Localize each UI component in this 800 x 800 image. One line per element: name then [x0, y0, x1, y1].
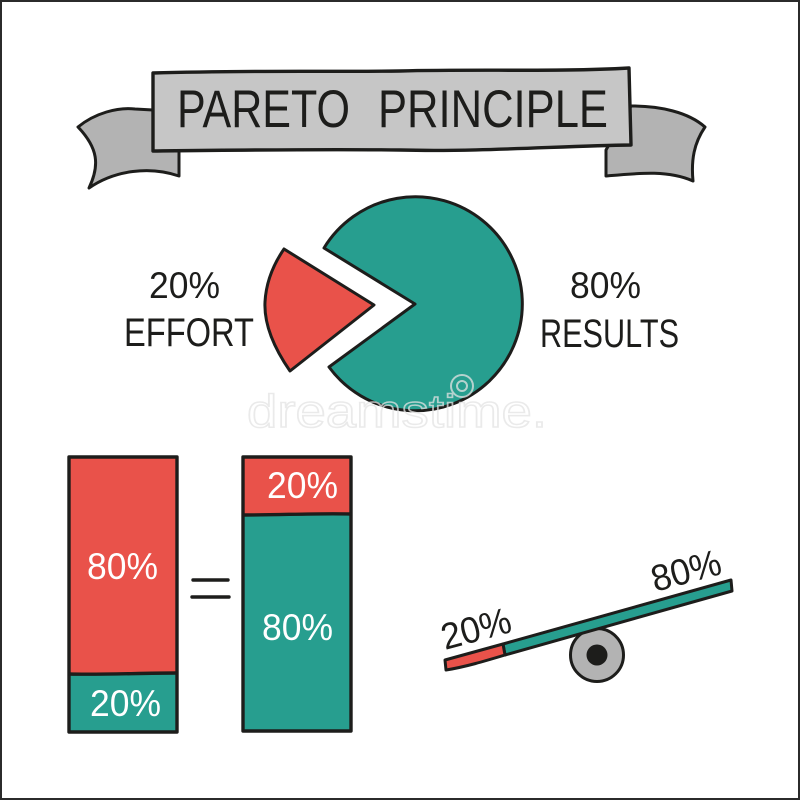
fulcrum wheel [570, 628, 624, 682]
seesaw [436, 542, 732, 682]
banner main ribbon [153, 68, 631, 151]
label: 80% results: 80% [570, 265, 641, 306]
banner right tail [606, 106, 705, 181]
right stacked bar [243, 457, 351, 731]
label: 20% effort: 20% [149, 265, 220, 306]
title banner [78, 68, 705, 188]
banner left tail [78, 109, 179, 188]
red segment 80% [69, 457, 177, 674]
seesaw label 20%: 20% [436, 600, 516, 658]
beam red section [445, 644, 505, 670]
label: 20% effort: EFFORT [124, 311, 254, 355]
fulcrum hub [586, 644, 608, 666]
red segment 20% [243, 457, 351, 515]
pie slice: 80% results [324, 197, 522, 411]
label: 80% results [540, 265, 679, 356]
teal segment 80% [243, 515, 351, 731]
left stacked bar [69, 457, 177, 732]
beam teal section [503, 580, 732, 655]
value 80%: 80% [262, 607, 333, 648]
title [177, 80, 608, 139]
title: PARETO [177, 80, 350, 139]
seesaw label 80%: 80% [646, 542, 726, 600]
value 80%: 80% [87, 546, 158, 587]
value 20%: 20% [267, 465, 338, 506]
label: 20% effort [124, 265, 254, 355]
label: 80% results: RESULTS [540, 312, 679, 356]
equals sign [192, 580, 229, 597]
pie slice: 20% effort [265, 249, 374, 371]
teal segment 20% [69, 674, 177, 732]
watermark: dreamstime. [247, 385, 547, 437]
title: PRINCIPLE [378, 80, 608, 139]
pie chart [265, 197, 522, 411]
value 20%: 20% [90, 683, 161, 724]
